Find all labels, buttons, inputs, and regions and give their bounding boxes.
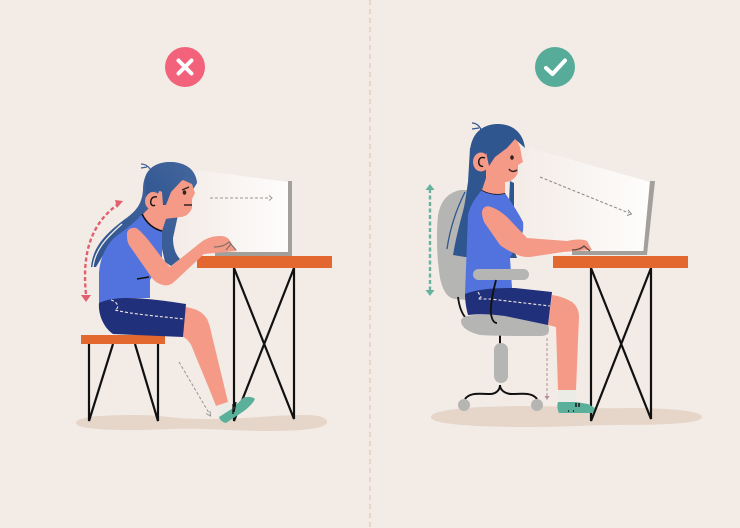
floor shadow left <box>76 415 327 431</box>
icon: wrong posture cross <box>165 47 205 87</box>
ear <box>473 152 489 172</box>
hair top left <box>141 162 197 205</box>
hair back left <box>91 162 197 267</box>
gaze arrow right <box>540 177 632 216</box>
arm <box>482 206 592 257</box>
shorts <box>465 288 552 325</box>
posture arrow foot left <box>179 362 210 416</box>
panel: wrong posture <box>76 162 332 431</box>
hair top right <box>470 123 525 166</box>
figure left <box>99 162 255 423</box>
leg <box>183 307 228 406</box>
shorts <box>99 298 186 337</box>
icon: correct posture check <box>535 47 575 87</box>
hair strand over back <box>93 224 122 267</box>
figure right <box>461 123 595 413</box>
arm <box>127 228 237 285</box>
ear <box>145 192 161 210</box>
seat <box>461 315 549 336</box>
neck and face <box>482 136 523 194</box>
laptop right <box>510 148 655 256</box>
shoelaces left <box>233 402 236 414</box>
gaze arrow left <box>210 196 272 200</box>
sock <box>216 402 233 416</box>
face details right <box>509 155 517 171</box>
shirt <box>99 214 162 304</box>
chair <box>437 190 543 411</box>
armrest <box>473 269 529 323</box>
leg <box>548 295 579 390</box>
stool <box>81 335 165 421</box>
desk left <box>197 256 332 421</box>
straight back arrow <box>426 184 434 296</box>
shoe <box>219 397 255 423</box>
floor shadow right <box>431 406 702 427</box>
desk right <box>553 256 688 421</box>
sock <box>558 390 576 402</box>
face details <box>182 187 192 205</box>
shoe <box>557 402 595 413</box>
laptop left <box>172 170 292 256</box>
shirt <box>465 190 523 294</box>
panel: correct posture <box>426 123 702 427</box>
curved back arrow <box>81 200 123 302</box>
posture arrow foot right <box>544 338 550 400</box>
neck and face <box>143 180 195 231</box>
hair back right <box>447 148 517 258</box>
